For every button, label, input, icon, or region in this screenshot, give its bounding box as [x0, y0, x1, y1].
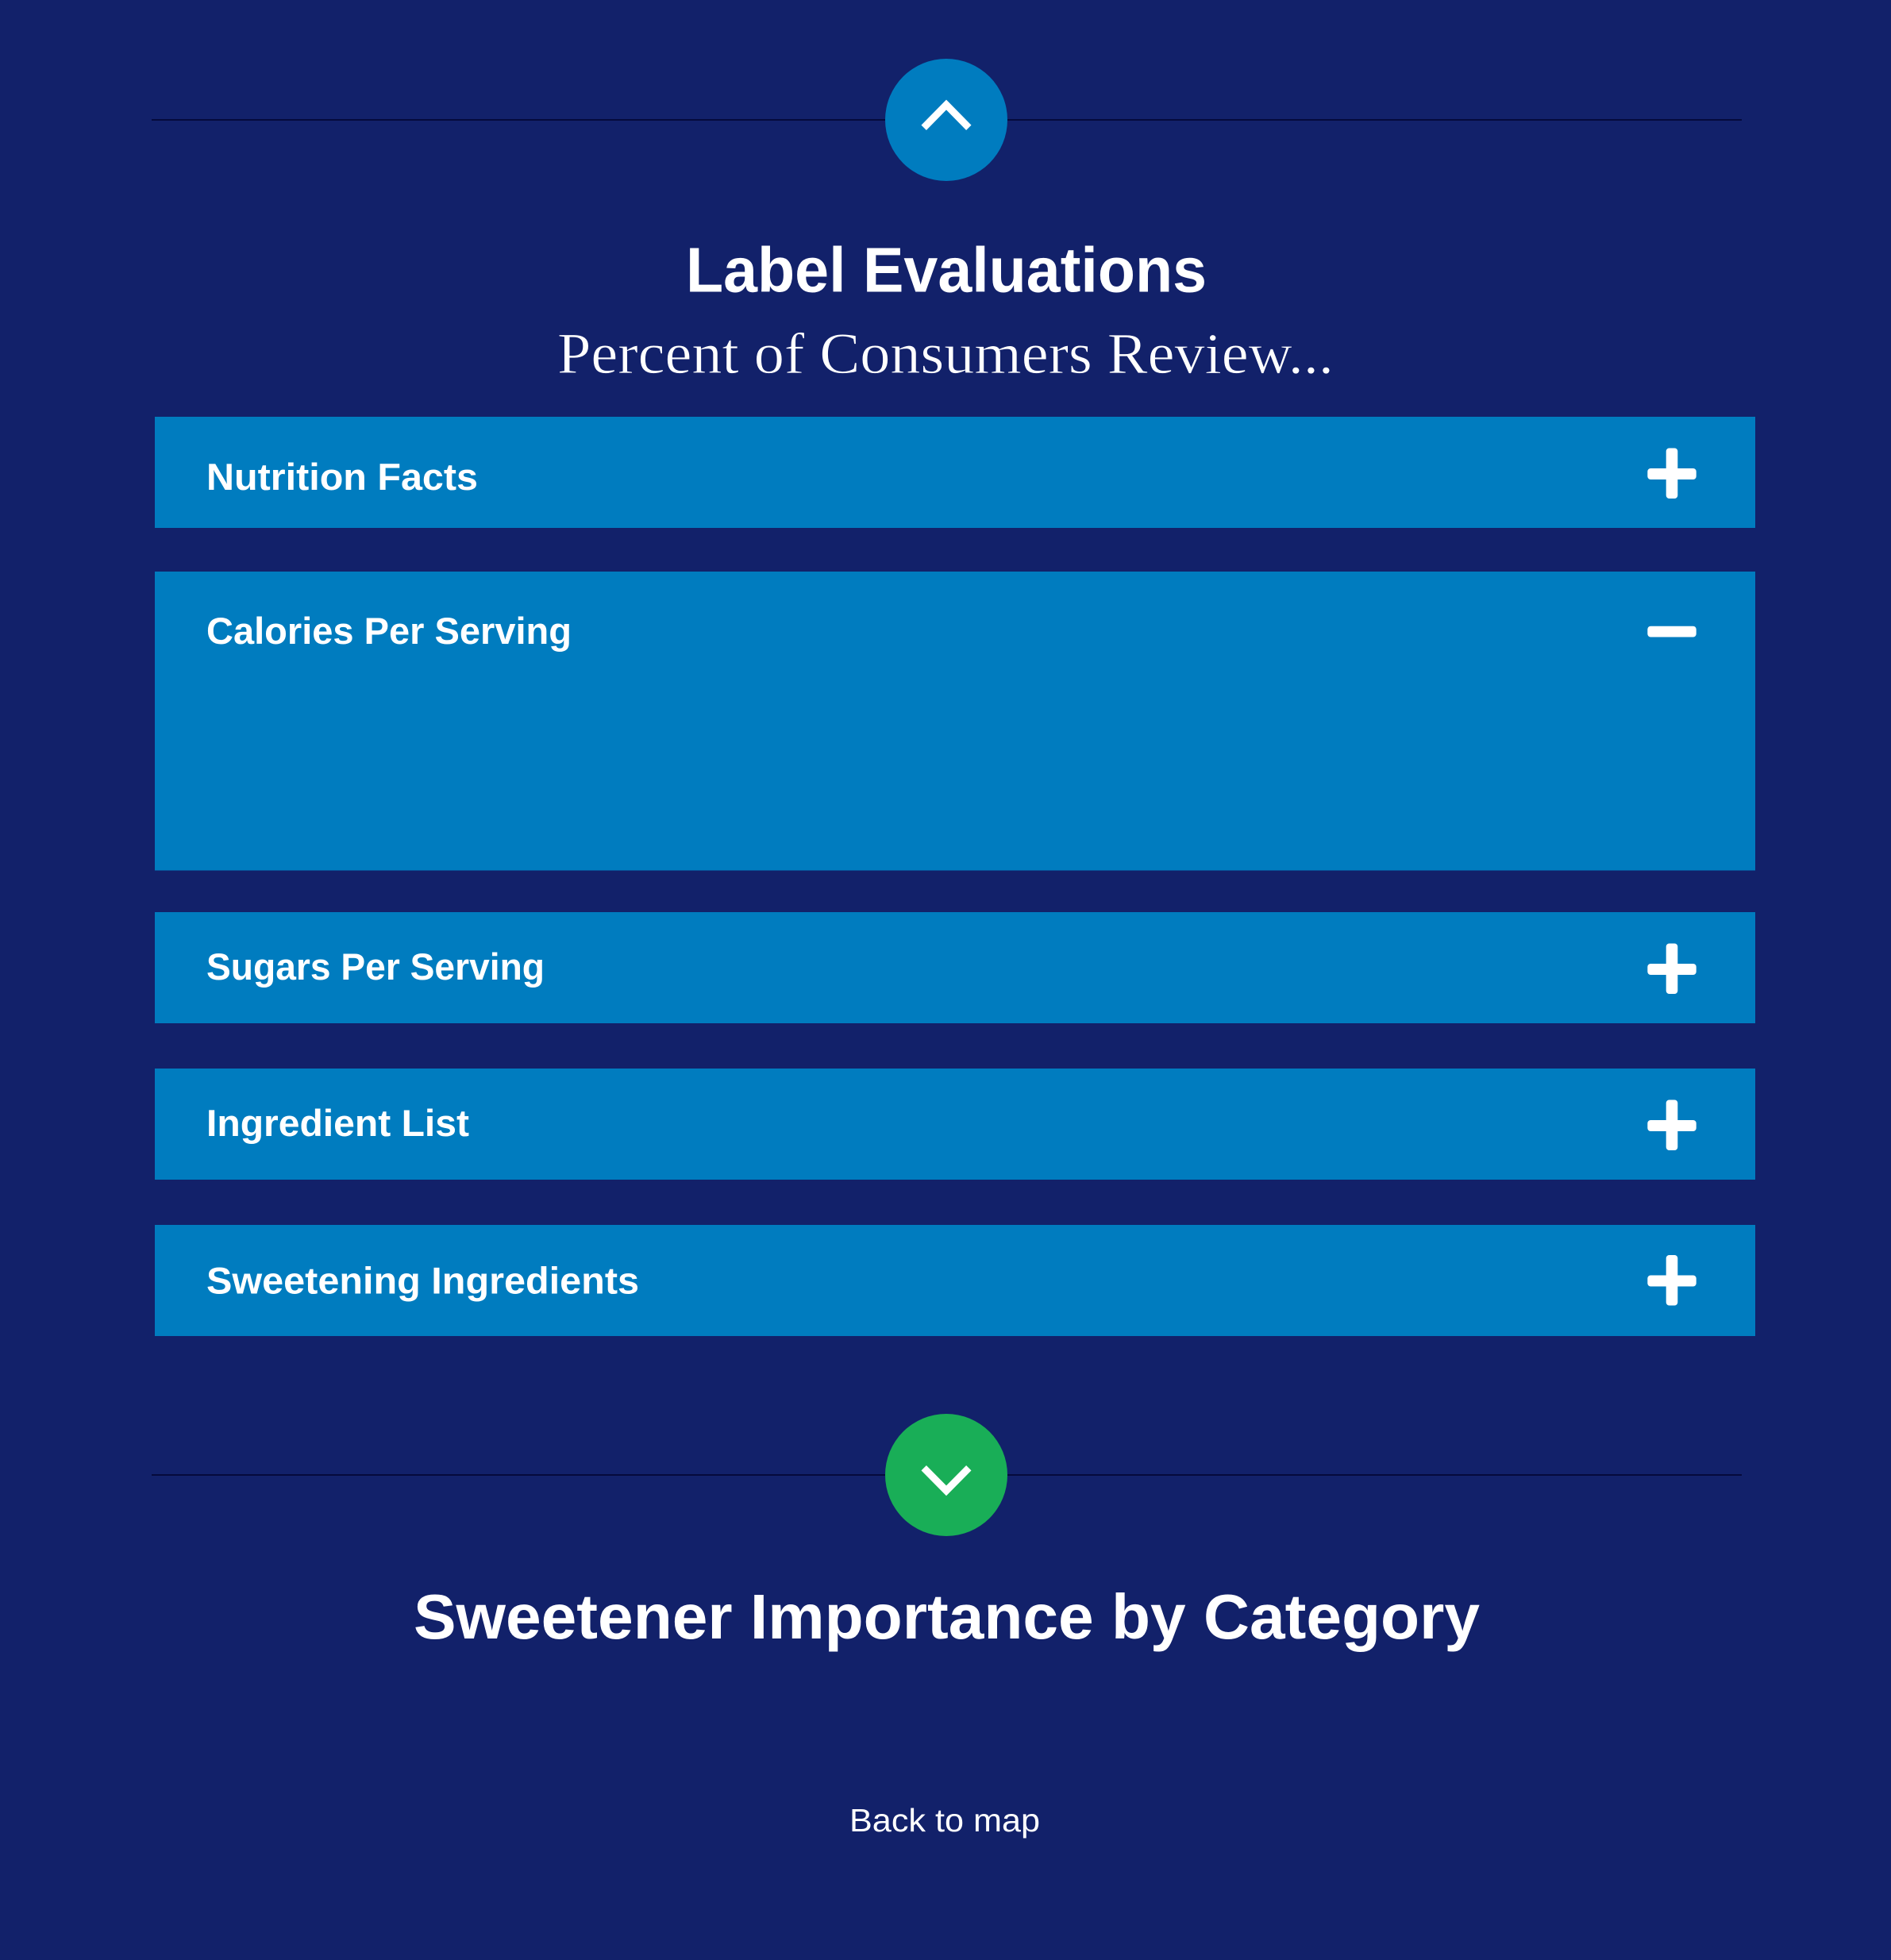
panel: Calories Per Serving (expanded): [155, 572, 1755, 870]
panel: Sugars Per Serving: [155, 912, 1755, 1023]
icon: up chevron button: [885, 59, 1007, 181]
label: Calories Per Serving: Calories Per Serving: [206, 610, 572, 652]
label: Ingredient List: Ingredient List: [206, 1102, 469, 1144]
icon: down chevron button: [885, 1414, 1007, 1536]
label: Nutrition Facts: Nutrition Facts: [206, 456, 478, 498]
icon: minus: [1647, 626, 1697, 637]
label: Sugars Per Serving: Sugars Per Serving: [206, 945, 545, 988]
panel: Sweetening Ingredients: [155, 1225, 1755, 1336]
heading: Sweetener Importance by Category: Sweetener Importance by Category: [414, 1581, 1481, 1652]
title: Label Evaluations: Label Evaluations: [686, 235, 1207, 305]
icon: plus: [1647, 448, 1697, 499]
icon: plus: [1647, 1100, 1697, 1150]
icon: plus: [1647, 943, 1697, 994]
subtitle: Percent of Consumers Review: Percent of Consumers Review...: [557, 322, 1334, 386]
icon: plus: [1647, 1255, 1697, 1305]
panel: Ingredient List: [155, 1069, 1755, 1180]
label: Sweetening Ingredients: Sweetening Ingredients: [206, 1259, 639, 1302]
panel: Nutrition Facts: [155, 417, 1755, 528]
link: Back to map: Back to map: [849, 1802, 1040, 1839]
